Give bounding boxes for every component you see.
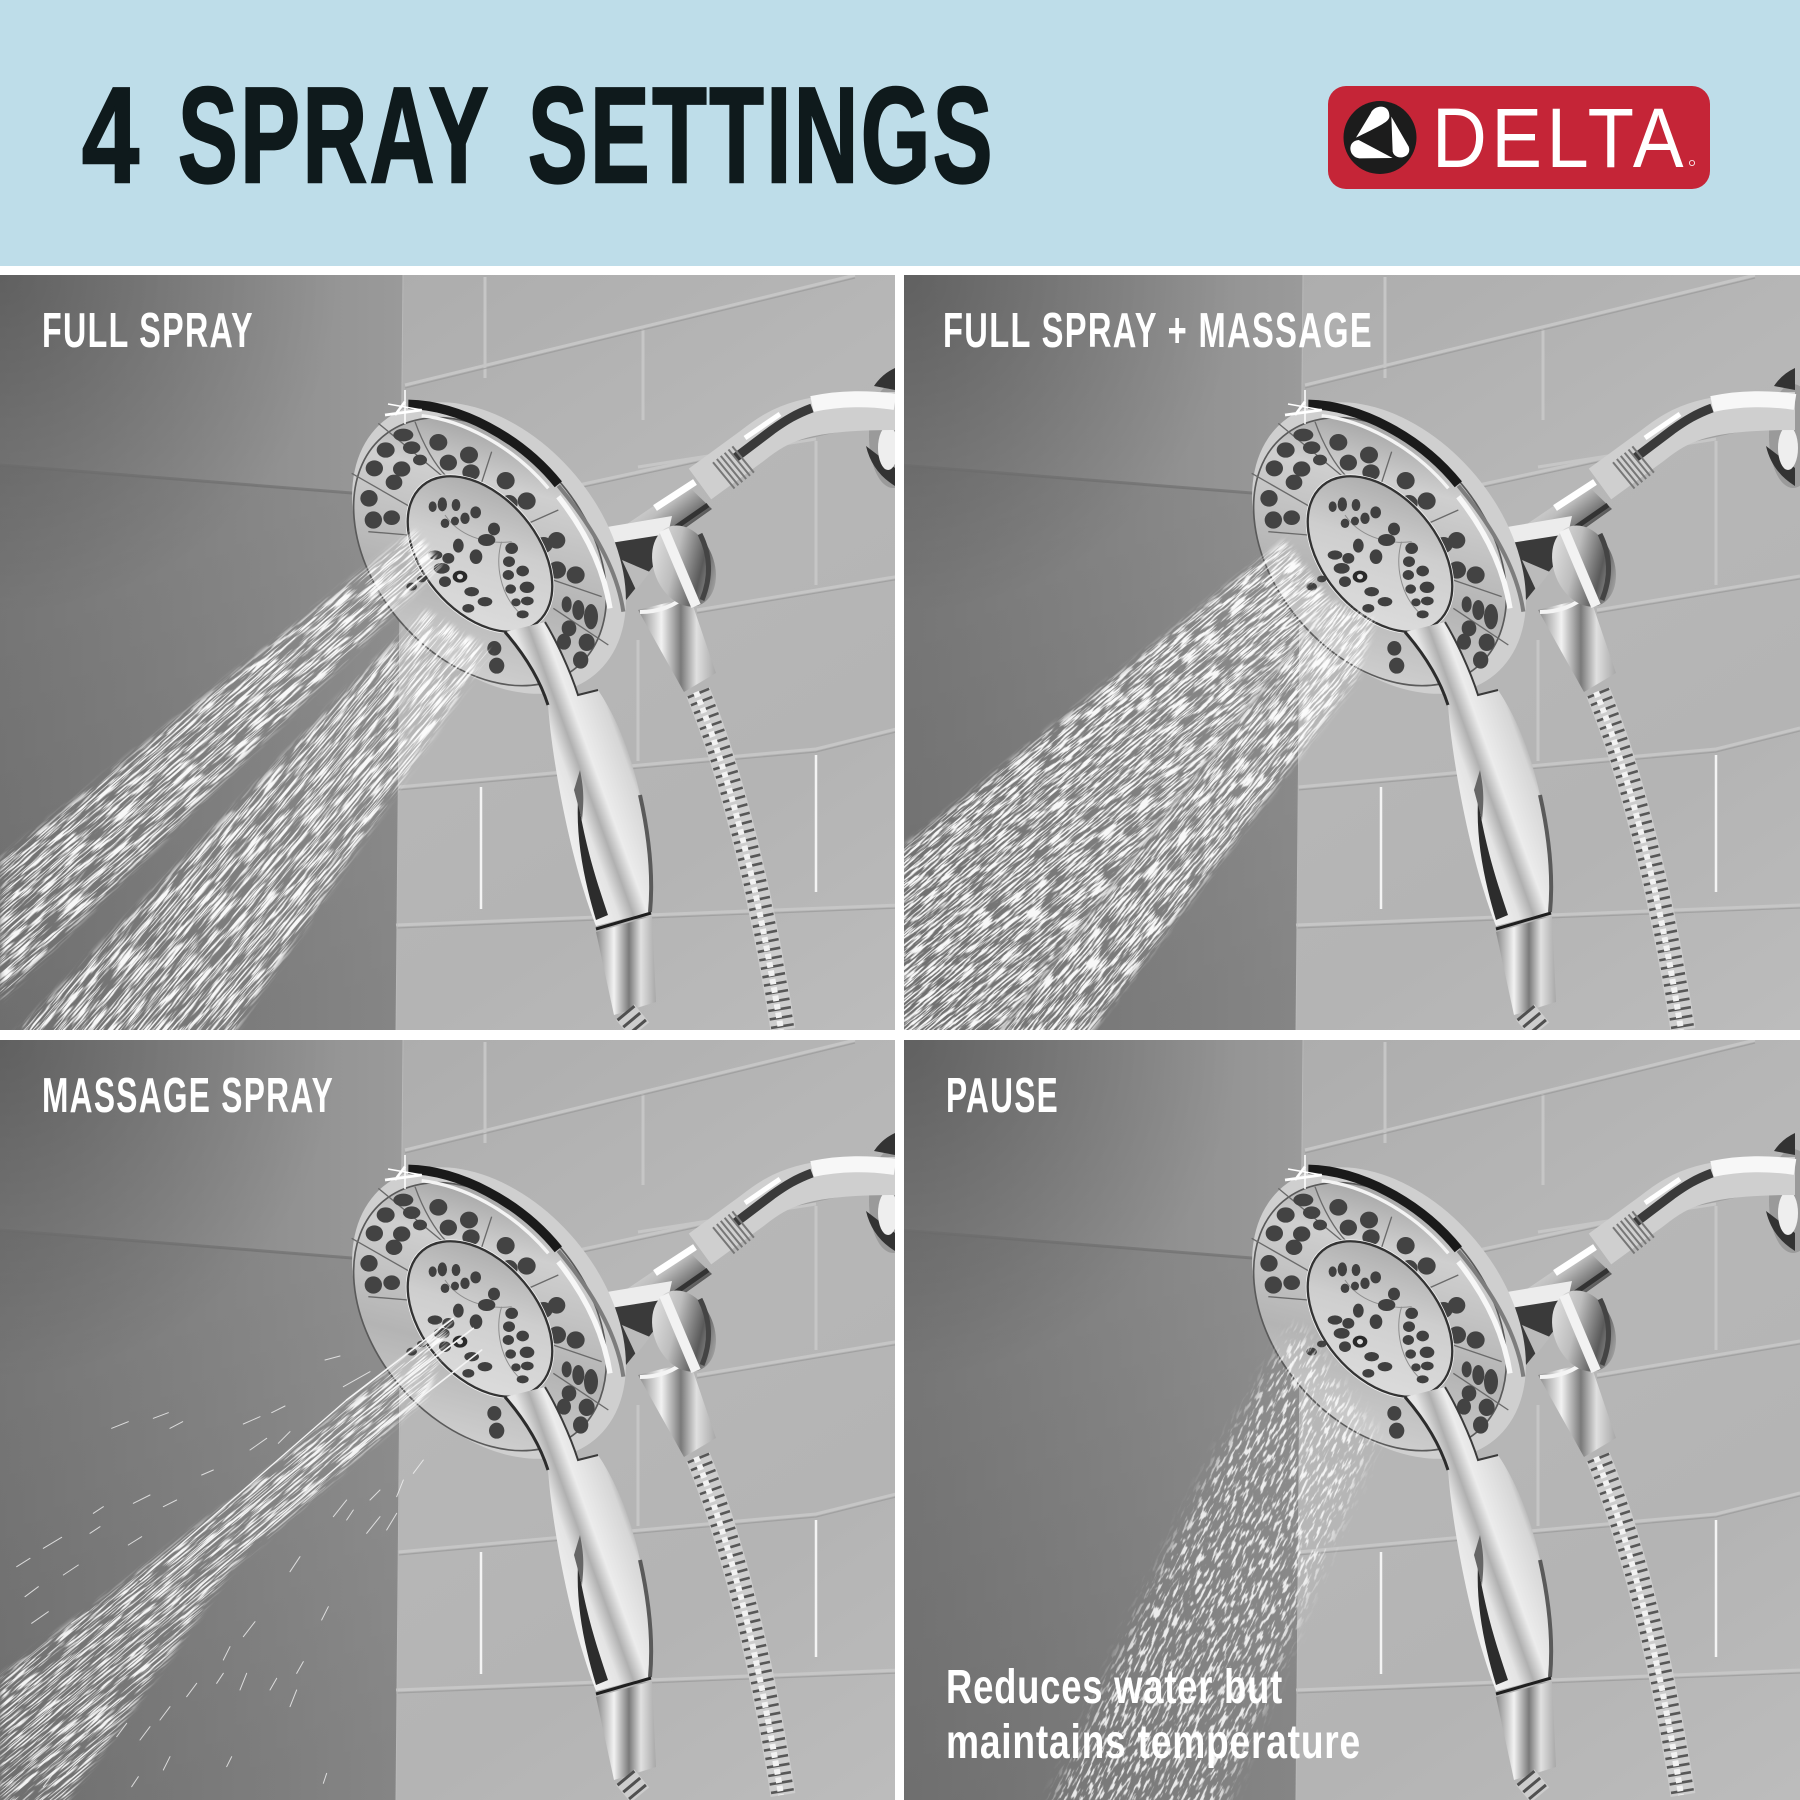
water spray: full spray streams [0,530,492,1030]
label: massage spray: MASSAGE SPRAY [42,1069,334,1123]
logo: Delta: DELTA [1432,91,1688,185]
header band [0,0,1800,266]
title: SPRAY [178,59,491,211]
caption: reduces water but maintains temperature: maintains temperature [946,1716,1361,1769]
title [82,59,995,211]
water spray: reduced trickle droplets [1046,1324,1378,1800]
panel: full spray [0,275,895,1030]
panel: pause [904,1040,1800,1800]
caption: reduces water but maintains temperature: Reduces water but [946,1661,1283,1714]
panel: massage spray [0,1040,895,1800]
title: 4 [82,59,139,211]
logo: Delta [1328,86,1710,189]
caption: reduces water but maintains temperature [946,1661,1361,1769]
title: SETTINGS [528,59,995,211]
water spray: narrow massage jet [0,1318,454,1800]
panel: full spray + massage [904,275,1800,1030]
water jets and scattered droplets [17,1318,482,1787]
water spray: combined streams [904,538,1376,1030]
label: pause: PAUSE [946,1069,1059,1123]
label: full spray + massage: FULL SPRAY + MASSAGE [943,304,1373,358]
label: full spray: FULL SPRAY [42,304,254,358]
